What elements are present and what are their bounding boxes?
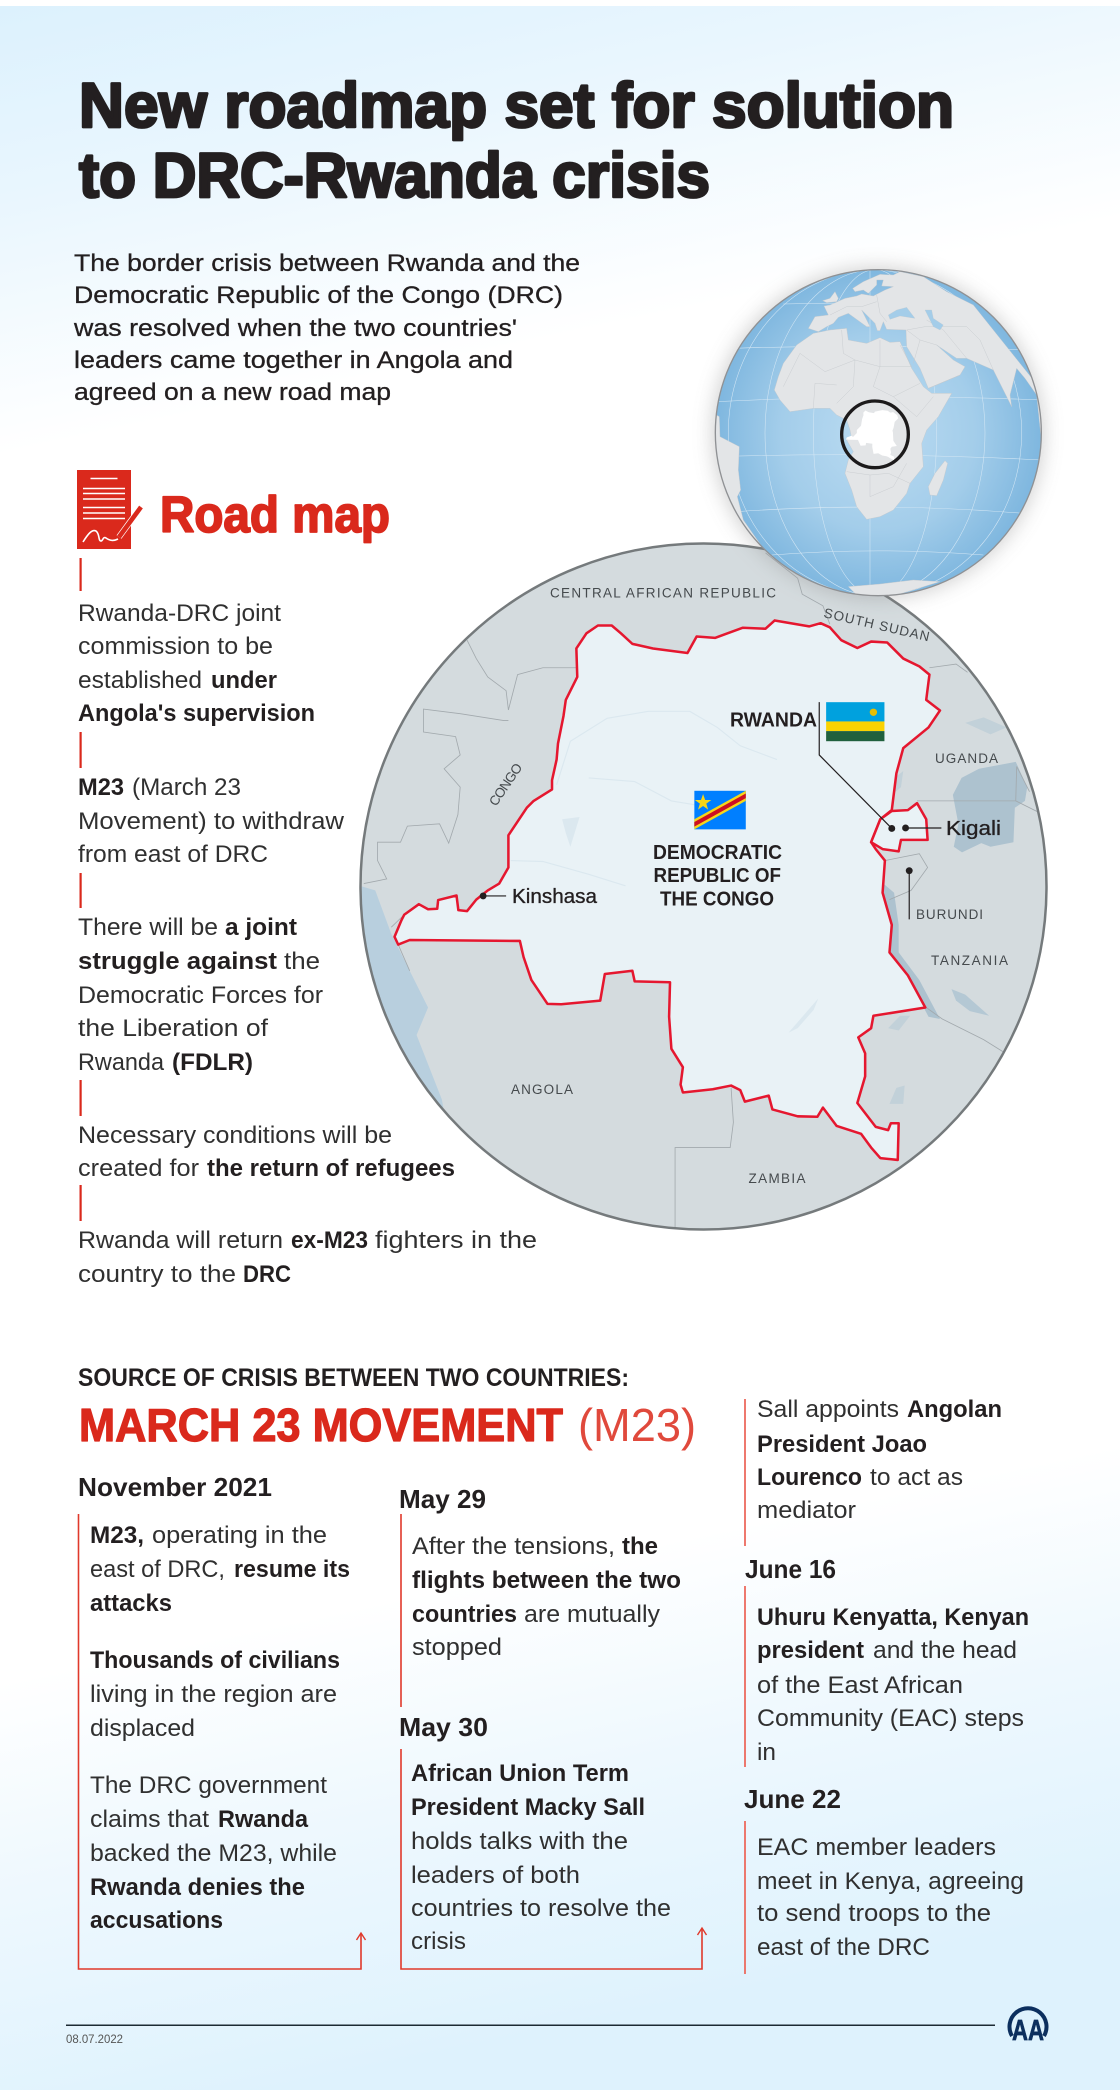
country label: burundi: BURUNDI bbox=[916, 907, 983, 922]
road map item 2: M23 bbox=[78, 774, 124, 801]
icon: signed document bbox=[77, 470, 141, 549]
timeline: June 16: Uhuru Kenyatta, Kenyan bbox=[757, 1604, 1029, 1631]
road map item 3: a joint bbox=[225, 914, 297, 941]
timeline: June 22: east of the DRC bbox=[757, 1934, 930, 1961]
title: to DRC-Rwanda crisis bbox=[79, 141, 710, 211]
road map item 4: created for bbox=[78, 1155, 199, 1182]
road map item 2: Movement) to withdraw bbox=[78, 808, 345, 835]
timeline: May 30: crisis bbox=[411, 1928, 466, 1955]
DRC label: DEMOCRATIC bbox=[653, 842, 782, 864]
country label: angola: ANGOLA bbox=[511, 1082, 573, 1097]
road map item 3: the Liberation of bbox=[78, 1015, 268, 1042]
globe ocean bbox=[715, 270, 1041, 596]
leader line: Rwanda bbox=[819, 702, 895, 832]
road map item 5: fighters in the bbox=[375, 1227, 537, 1254]
road map item 4 bbox=[78, 1080, 455, 1182]
road map item 1 bbox=[78, 558, 315, 727]
timeline: June 22 bbox=[744, 1784, 1024, 1974]
intro text: Democratic Republic of the Congo (DRC) bbox=[74, 282, 563, 309]
timeline: June 16: June 16 bbox=[745, 1554, 836, 1584]
road map item 5: Rwanda will return bbox=[78, 1227, 283, 1254]
timeline: May 29: countries bbox=[412, 1601, 517, 1628]
road map item 3: struggle against bbox=[78, 948, 277, 975]
timeline: June 22: EAC member leaders bbox=[757, 1834, 996, 1861]
logo: AA bbox=[1010, 2008, 1046, 2047]
timeline: May 30: President Macky Sall bbox=[411, 1794, 645, 1821]
timeline: May 29: the bbox=[622, 1533, 658, 1560]
timeline: June 16: president bbox=[757, 1637, 864, 1664]
intro text bbox=[73, 250, 580, 406]
timeline: November 2021: November 2021 bbox=[78, 1472, 272, 1502]
city label: Kinshasa: Kinshasa bbox=[512, 886, 598, 908]
intro text: agreed on a new road map bbox=[74, 379, 391, 406]
road map item 1: Rwanda-DRC joint bbox=[78, 600, 281, 627]
timeline: November 2021: The DRC government bbox=[90, 1772, 327, 1799]
title: New roadmap set for solution bbox=[79, 71, 954, 141]
date: 08.07.2022 bbox=[66, 2034, 123, 2046]
timeline: May 30 bbox=[399, 1712, 706, 1969]
map border circle bbox=[360, 544, 1046, 1230]
road map item 1: established bbox=[78, 667, 202, 694]
timeline: June 16 bbox=[745, 1554, 1029, 1767]
timeline: May 30 continued: mediator bbox=[757, 1497, 856, 1524]
intro text: leaders came together in Angola and bbox=[74, 347, 513, 374]
road map item 2: (March 23 bbox=[132, 774, 241, 801]
section kicker: SOURCE OF CRISIS BETWEEN TWO COUNTRIES: bbox=[78, 1364, 629, 1392]
road map item 5: ex-M23 bbox=[291, 1227, 368, 1254]
road map item 5: country to the bbox=[78, 1261, 236, 1288]
heading: road map: Road map bbox=[160, 486, 390, 543]
timeline: May 30: holds talks with the bbox=[411, 1828, 628, 1855]
democratic republic of the congo outline bbox=[395, 620, 940, 1160]
section heading: (M23) bbox=[578, 1399, 696, 1451]
timeline: June 22: meet in Kenya, agreeing bbox=[757, 1868, 1024, 1895]
timeline: November 2021: displaced bbox=[90, 1715, 195, 1742]
globe shadow bbox=[713, 268, 1043, 598]
city marker: Kigali bbox=[902, 825, 941, 831]
timeline: May 29: After the tensions, bbox=[412, 1533, 615, 1560]
section heading: MARCH 23 MOVEMENT bbox=[79, 1399, 563, 1451]
road map item 1: commission to be bbox=[78, 633, 273, 660]
country label: central african republic: CENTRAL AFRICAN REPUBLIC bbox=[550, 586, 776, 600]
globe rim bbox=[715, 270, 1041, 596]
timeline: June 16: and the head bbox=[873, 1637, 1017, 1664]
flag: DRC bbox=[694, 791, 746, 829]
timeline: May 30: countries to resolve the bbox=[411, 1895, 671, 1922]
road map item 3: the bbox=[284, 948, 320, 975]
timeline: May 29: are mutually bbox=[524, 1601, 660, 1628]
timeline: November 2021: resume its bbox=[234, 1556, 350, 1583]
road map item 3: Democratic Forces for bbox=[78, 982, 323, 1009]
road map item 3: Rwanda bbox=[78, 1049, 165, 1076]
road map item 2: from east of DRC bbox=[78, 841, 268, 868]
timeline: November 2021: living in the region are bbox=[90, 1681, 337, 1708]
DRC label bbox=[653, 842, 782, 910]
timeline: May 30: African Union Term bbox=[411, 1760, 629, 1787]
road map item 1: Angola's supervision bbox=[78, 700, 315, 727]
timeline: November 2021: east of DRC, bbox=[90, 1556, 225, 1583]
logo: AA: AA bbox=[1012, 2015, 1044, 2047]
globe land bbox=[713, 270, 1047, 600]
timeline: May 30: leaders of both bbox=[411, 1862, 580, 1889]
road map item 2 bbox=[78, 732, 345, 868]
intro text: was resolved when the two countries' bbox=[73, 315, 517, 342]
city label: Kigali: Kigali bbox=[946, 818, 1001, 840]
timeline: May 29: stopped bbox=[412, 1634, 502, 1661]
timeline: May 30 continued bbox=[745, 1396, 1002, 1546]
title bbox=[79, 71, 954, 211]
timeline: May 30: May 30 bbox=[399, 1712, 488, 1742]
map base circle bbox=[360, 544, 1046, 1230]
timeline: November 2021: Rwanda bbox=[218, 1806, 309, 1833]
timeline: June 16: Community (EAC) steps bbox=[757, 1705, 1024, 1732]
road map item 5: DRC bbox=[243, 1261, 291, 1288]
timeline: November 2021: claims that bbox=[90, 1806, 209, 1833]
timeline: May 30 continued: Lourenco bbox=[757, 1464, 862, 1491]
country label: zambia: ZAMBIA bbox=[748, 1171, 806, 1186]
road map item 4: Necessary conditions will be bbox=[78, 1122, 392, 1149]
timeline: May 29 bbox=[399, 1484, 681, 1707]
DRC label: REPUBLIC OF bbox=[654, 865, 781, 887]
timeline: May 29: May 29 bbox=[399, 1484, 486, 1514]
city marker: Kinshasa bbox=[480, 892, 506, 899]
timeline: May 30 continued: Angolan bbox=[907, 1396, 1002, 1423]
road map item 1: under bbox=[211, 667, 277, 694]
timeline: June 22: June 22 bbox=[744, 1784, 841, 1814]
timeline: May 30 continued: to act as bbox=[870, 1464, 963, 1491]
road map item 3 bbox=[78, 873, 323, 1076]
marker: Burundi bbox=[906, 867, 913, 919]
timeline: November 2021: Rwanda denies the bbox=[90, 1874, 305, 1901]
flag: Rwanda bbox=[826, 702, 884, 741]
Rwanda label: RWANDA bbox=[730, 710, 817, 732]
timeline: May 30 continued: Sall appoints bbox=[757, 1396, 899, 1423]
country label: congo: CONGO bbox=[486, 760, 525, 809]
globe locator bbox=[713, 268, 1047, 600]
country label: south sudan: SOUTH SUDAN bbox=[822, 605, 931, 644]
timeline: November 2021: attacks bbox=[90, 1590, 172, 1617]
road map item 3: (FDLR) bbox=[172, 1049, 253, 1076]
timeline: November 2021: operating in the bbox=[152, 1522, 327, 1549]
road map item 5 bbox=[78, 1185, 537, 1288]
timeline: June 16: of the East African bbox=[757, 1672, 963, 1699]
country label: uganda: UGANDA bbox=[935, 751, 998, 766]
timeline: November 2021: M23, bbox=[90, 1522, 144, 1549]
DRC label: THE CONGO bbox=[660, 888, 774, 910]
timeline: June 16: in bbox=[757, 1739, 776, 1766]
timeline: November 2021: backed the M23, while bbox=[90, 1840, 337, 1867]
timeline: May 30 continued: President Joao bbox=[757, 1431, 927, 1458]
timeline: June 22: to send troops to the bbox=[757, 1900, 991, 1927]
map geography bbox=[350, 553, 1043, 1230]
globe highlighted DRC bbox=[846, 410, 898, 460]
footer rule bbox=[66, 2024, 995, 2026]
timeline: November 2021: accusations bbox=[90, 1907, 223, 1934]
timeline: November 2021 bbox=[78, 1472, 366, 1969]
country label: tanzania: TANZANIA bbox=[931, 953, 1008, 968]
road map item 3: There will be bbox=[78, 914, 218, 941]
road map item 4: the return of refugees bbox=[207, 1155, 455, 1182]
timeline: November 2021: Thousands of civilians bbox=[90, 1647, 340, 1674]
intro text: The border crisis between Rwanda and the bbox=[74, 250, 580, 277]
panel: map of the DRC bbox=[350, 544, 1046, 1230]
timeline: May 29: flights between the two bbox=[412, 1567, 681, 1594]
locator ring bbox=[842, 401, 908, 468]
